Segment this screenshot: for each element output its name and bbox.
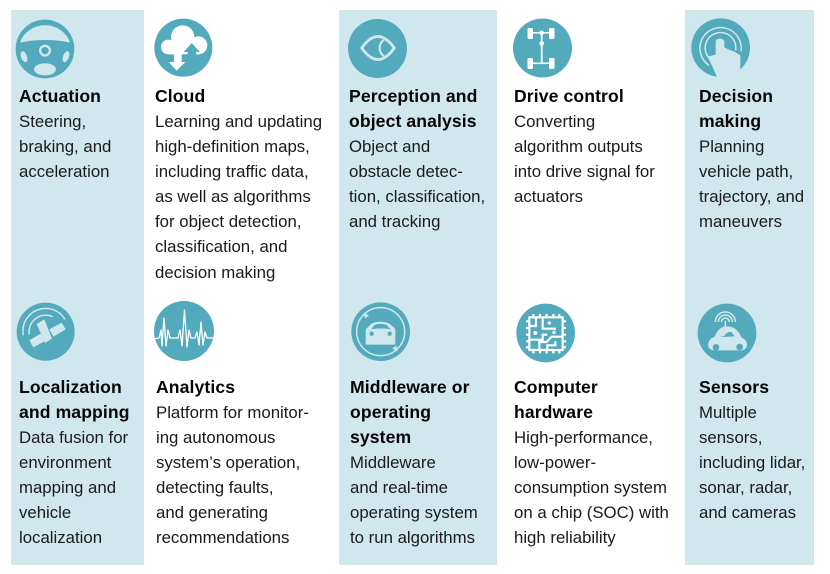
text: Actuation: braking, and <box>19 137 111 156</box>
icon: eye <box>348 19 407 78</box>
text: Analytics: Platform for monitor- <box>156 403 309 422</box>
text: Analytics: and generating <box>156 503 268 522</box>
text: Middleware or operating system: to run algorithms <box>350 528 475 547</box>
icon: steering wheel <box>16 20 74 78</box>
text: Analytics: Analytics <box>156 376 235 396</box>
text: Decision making: maneuvers <box>699 212 782 231</box>
text: Localization and mapping <box>19 376 130 547</box>
text: Cloud: including traffic data, <box>155 162 309 181</box>
text: Actuation: Actuation <box>19 86 101 106</box>
text: Localization and mapping: localization <box>19 528 102 547</box>
text: Decision making: making <box>699 111 761 131</box>
text: Perception and object analysis <box>349 86 485 231</box>
text: Middleware or operating system: Middleware <box>350 453 436 472</box>
text: Decision making: Planning <box>699 137 764 156</box>
text: Actuation: acceleration <box>19 162 110 181</box>
text: Localization and mapping: and mapping <box>19 402 130 422</box>
text: Middleware or operating system <box>350 376 478 547</box>
text: Sensors: including lidar, <box>699 453 805 472</box>
text: Decision making: Decision <box>699 86 773 106</box>
text: Analytics: system’s operation, <box>156 453 300 472</box>
icon: analytics pulse <box>154 301 214 361</box>
text: Localization and mapping: environment <box>19 453 111 472</box>
text: Computer hardware <box>514 376 669 547</box>
icon: car in circular arrows <box>351 302 410 361</box>
text: Computer hardware: on a chip (SOC) with <box>514 503 669 522</box>
text: Middleware or operating system: Middleware or <box>350 376 470 396</box>
text: Analytics: recommendations <box>156 528 289 547</box>
text: Sensors <box>699 376 805 522</box>
text: Sensors: and cameras <box>699 503 796 522</box>
panel: column 1 background <box>11 10 144 565</box>
text: Cloud: high-definition maps, <box>155 137 310 156</box>
text: Middleware or operating system: operating <box>350 402 431 422</box>
text: Sensors: sensors, <box>699 428 762 447</box>
text: Perception and object analysis: obstacle detec- <box>349 162 463 181</box>
text: Cloud <box>155 86 322 282</box>
text: Actuation: Steering, <box>19 112 86 131</box>
text: Drive control <box>514 86 655 206</box>
panel: column 5 background <box>685 10 814 565</box>
text: Localization and mapping: Data fusion for <box>19 428 128 447</box>
text: Decision making <box>699 86 804 231</box>
text: Cloud: classification, and <box>155 237 287 256</box>
icon: computer chip <box>516 304 575 362</box>
text: Analytics: detecting faults, <box>156 478 274 497</box>
text: Middleware or operating system: and real-time <box>350 478 448 497</box>
text: Cloud: as well as algorithms <box>155 187 311 206</box>
text: Sensors: Multiple <box>699 403 757 422</box>
text: Middleware or operating system: system <box>350 427 411 447</box>
text: Drive control: Converting <box>514 112 595 131</box>
icon: connected car sensors <box>698 304 756 362</box>
text: Sensors: Sensors <box>699 376 769 396</box>
text: Perception and object analysis: and tracking <box>349 212 440 231</box>
text: Sensors: sonar, radar, <box>699 478 792 497</box>
text: Analytics: ing autonomous <box>156 428 275 447</box>
icon: cloud with arrows <box>154 18 212 77</box>
text: Decision making: trajectory, and <box>699 187 804 206</box>
text: Computer hardware: hardware <box>514 402 593 422</box>
text: Cloud: decision making <box>155 263 275 282</box>
text: Cloud: Cloud <box>155 86 205 106</box>
text: Drive control: algorithm outputs <box>514 137 643 156</box>
icon: touch finger <box>691 18 750 77</box>
text: Computer hardware: High-performance, <box>514 428 653 447</box>
text: Computer hardware: Computer <box>514 376 598 396</box>
text: Perception and object analysis: Perception and <box>349 86 478 106</box>
text: Middleware or operating system: operating system <box>350 503 478 522</box>
text: Computer hardware: low-power- <box>514 453 596 472</box>
text: Localization and mapping: vehicle <box>19 503 71 522</box>
text: Cloud: Learning and updating <box>155 112 322 131</box>
text: Drive control: into drive signal for <box>514 162 655 181</box>
text: Computer hardware: high reliability <box>514 528 616 547</box>
text: Perception and object analysis: object analysis <box>349 111 477 131</box>
text: Perception and object analysis: Object and <box>349 137 430 156</box>
text: Drive control: actuators <box>514 187 583 206</box>
icon: satellite <box>16 302 75 361</box>
icon: drive chassis <box>513 18 572 78</box>
text: Localization and mapping: mapping and <box>19 478 116 497</box>
text: Analytics <box>156 376 309 547</box>
text: Computer hardware: consumption system <box>514 478 667 497</box>
text: Decision making: vehicle path, <box>699 162 793 181</box>
panel: column 3 background <box>339 10 497 565</box>
text: Cloud: for object detection, <box>155 212 301 231</box>
text: Perception and object analysis: tion, classification, <box>349 187 485 206</box>
text: Localization and mapping: Localization <box>19 376 122 396</box>
text: Drive control: Drive control <box>514 86 624 106</box>
text: Actuation <box>19 86 111 181</box>
